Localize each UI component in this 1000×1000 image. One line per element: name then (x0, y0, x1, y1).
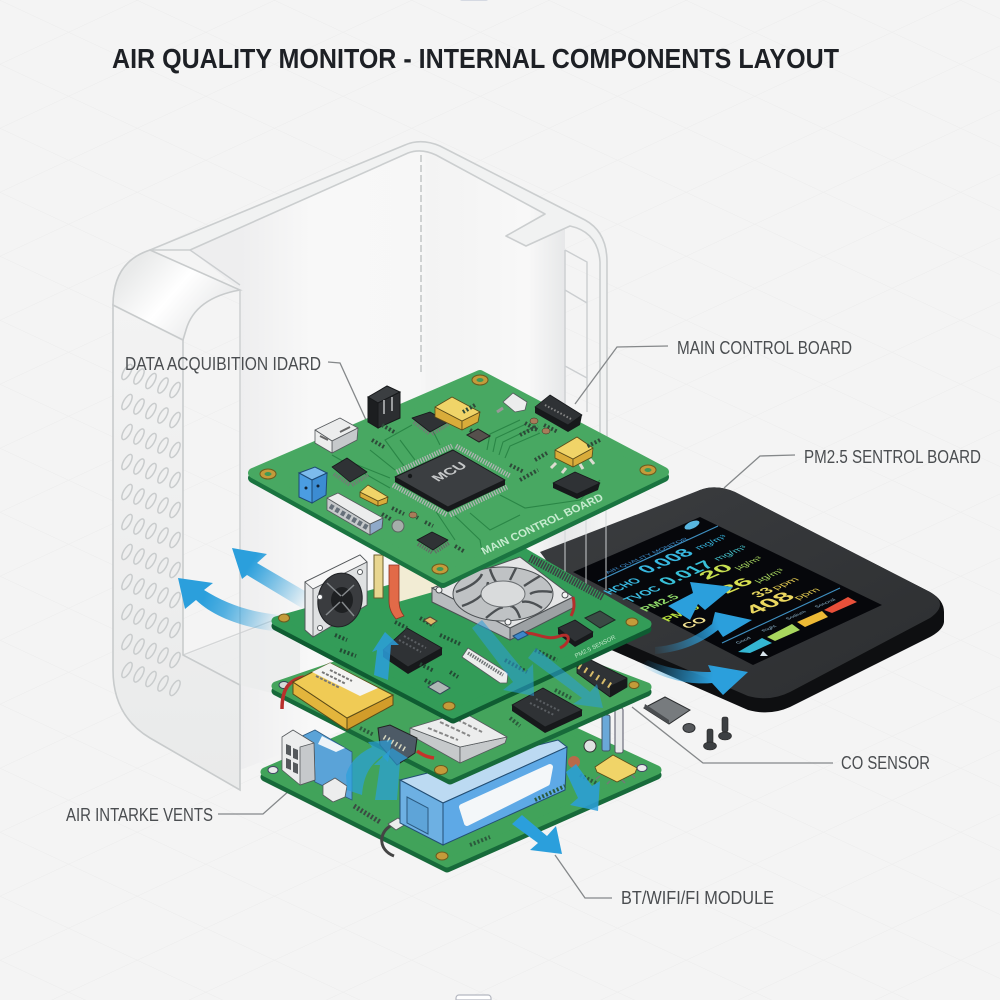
yellow component (435, 397, 480, 430)
mount hole (443, 702, 455, 710)
yellow chip (595, 755, 637, 784)
display readings: PM10 (658, 603, 703, 623)
leader: air intake vents (218, 790, 290, 814)
display readings: 26 (713, 575, 758, 596)
diagonal arrow 1 (472, 620, 534, 696)
display legend labels: Good (735, 637, 753, 645)
airflow arrow to display lower (640, 660, 748, 695)
leader: CO sensor (632, 707, 833, 763)
airflow arrow to display upper (668, 582, 733, 620)
enclosure top rim (150, 142, 607, 448)
small grey IC (585, 611, 615, 628)
airflow arrow left lower (178, 578, 280, 632)
mount hole (278, 614, 290, 622)
SMD row (354, 806, 380, 822)
display readings: µg/m³ (751, 568, 789, 584)
transparent enclosure (113, 142, 607, 790)
left QFP chip (332, 458, 368, 485)
screw 1 (704, 729, 716, 750)
diagonal arrow 2 (528, 648, 603, 708)
enclosure floor (186, 612, 300, 700)
label: data acquisition: DATA ACQUIBITION IDARD (125, 354, 321, 374)
small parts (360, 690, 571, 735)
mount hole (637, 764, 647, 772)
loose SOIC part and screws (644, 697, 732, 750)
label: CO sensor: CO SENSOR (841, 753, 930, 773)
vent block (282, 730, 315, 785)
display air quality bar (738, 597, 857, 656)
display readings: HCHO (599, 576, 645, 596)
enclosure front rim (113, 250, 240, 340)
ribbon connector (462, 648, 508, 683)
leader: main control board (575, 346, 668, 404)
board body (276, 625, 647, 780)
blue battery module (400, 740, 567, 845)
MCU chip (393, 446, 510, 515)
mount hole (268, 766, 278, 774)
display readings: PM2.5 (636, 592, 682, 613)
board body (253, 380, 664, 583)
enclosure back corner dashed line (420, 155, 422, 372)
label: air intake vents: AIR INTARKE VENTS (66, 805, 213, 825)
display readings: AIR QUALITY MONITOR (604, 537, 691, 575)
red post (389, 565, 404, 619)
display readings: TVOC (619, 584, 665, 604)
mount hole (279, 682, 289, 688)
top edge tab (460, 0, 488, 1)
airflow arrow to display middle (655, 612, 752, 654)
board surface (253, 375, 664, 578)
lower right arrow (566, 764, 600, 811)
display readings: ppm (769, 576, 802, 591)
SOIC chip (417, 532, 449, 553)
yellow post (374, 555, 383, 598)
display legend labels: Right (761, 625, 779, 633)
board silk text: MAIN CONTROL BOARD (479, 492, 606, 558)
passive parts (372, 405, 600, 552)
enclosure back wall (190, 151, 600, 770)
standoff posts (602, 708, 623, 753)
display readings: ppm (791, 587, 823, 601)
blue block (299, 467, 327, 503)
mount hole (629, 682, 639, 688)
display readings: 33 (748, 586, 778, 600)
display readings: 20 (693, 561, 738, 582)
display wifi dot (683, 519, 701, 531)
yellow battery (293, 663, 393, 730)
black long connector (535, 395, 582, 432)
MCU text: MCU (428, 460, 470, 484)
enclosure right side slot (565, 250, 587, 412)
display legend labels (735, 598, 838, 645)
small IC (467, 429, 490, 442)
display legend labels: Sodium (785, 610, 809, 621)
cream block (398, 560, 440, 602)
leader: PM2.5 board (724, 455, 795, 488)
board surface (276, 552, 647, 714)
up arrow (372, 632, 399, 680)
grey trimmer (392, 520, 404, 532)
bottom edge tab (456, 995, 491, 1000)
lower center arrow (374, 748, 408, 800)
black connector (577, 658, 627, 697)
red wire (282, 677, 304, 709)
yellow chip right (551, 437, 594, 473)
blue sensor housing (300, 730, 352, 800)
enclosure panel edge lines (190, 250, 240, 770)
small QFP chip (412, 412, 448, 434)
board 3: sensor board (276, 620, 647, 780)
cable connector (388, 818, 406, 830)
display readings: 0.008 (633, 547, 699, 576)
display readings: mg/m³ (692, 534, 731, 551)
display module (540, 487, 944, 712)
loose SOIC chip (644, 697, 690, 724)
white switch (497, 393, 527, 412)
mount hole (626, 618, 638, 626)
blue connector (513, 631, 528, 640)
black chip right (553, 472, 600, 499)
black header (368, 386, 400, 428)
small yellow component (360, 485, 388, 506)
small parts (470, 740, 596, 845)
bottom board: BT module board (265, 683, 657, 868)
red lead (417, 751, 434, 758)
board surface (265, 683, 657, 863)
leader: BT WiFi module (555, 855, 612, 898)
display legend labels: Sonoral (814, 598, 838, 609)
ventilation slots (120, 363, 182, 697)
white module (410, 712, 507, 763)
lower left curved arrow (346, 740, 392, 795)
washer (683, 724, 695, 732)
board 2: fan board (276, 552, 647, 719)
mount hole (436, 852, 448, 860)
display screen (573, 517, 882, 665)
header pins strip (530, 558, 603, 597)
cable (382, 825, 394, 856)
display side (545, 487, 944, 712)
bottom arrow (512, 815, 562, 854)
screw 2 (718, 717, 732, 740)
small black IC (558, 620, 593, 647)
top board: main control board (253, 375, 664, 583)
black IC (383, 628, 442, 674)
QFN chip (512, 688, 582, 733)
label: main control board: MAIN CONTROL BOARD (677, 338, 852, 358)
small parts (335, 618, 557, 688)
mounting holes (260, 375, 656, 574)
display readings: 408 (739, 589, 800, 617)
small fan (305, 555, 367, 637)
board surface (276, 620, 647, 775)
label: BT WiFi module: BT/WIFI/FI MODULE (621, 888, 774, 908)
display readings (599, 534, 823, 630)
dark connector (378, 725, 417, 765)
leader: data acquisition board (328, 362, 366, 420)
small airflow arrows over boards (346, 620, 603, 854)
display readings: µg/m³ (731, 555, 767, 571)
board body (276, 557, 647, 719)
traces (332, 420, 600, 552)
white chip (428, 681, 450, 694)
display readings: 0.017 (654, 559, 720, 588)
title: AIR QUALITY MONITOR - INTERNAL COMPONENTS LAYOUT (112, 43, 839, 74)
large fan (432, 557, 573, 640)
display readings: mg/m³ (711, 544, 751, 562)
white connector (315, 418, 358, 453)
airflow arrow left upper (232, 548, 310, 610)
display legend line (722, 588, 840, 643)
board body (265, 688, 657, 868)
display bezel (540, 487, 940, 698)
red wires (520, 597, 574, 648)
board caption: PM2.5 SENSOR (574, 635, 617, 660)
resistors (409, 418, 550, 518)
small white switch (323, 778, 347, 802)
enclosure front left panel (113, 305, 240, 790)
mount hole (434, 766, 448, 774)
display readings: CO (677, 615, 711, 630)
amber parts (424, 617, 437, 625)
enclosure floor lines (182, 610, 300, 685)
white long connector (327, 493, 383, 535)
guide posts to display (565, 495, 606, 590)
display header line (598, 526, 718, 581)
